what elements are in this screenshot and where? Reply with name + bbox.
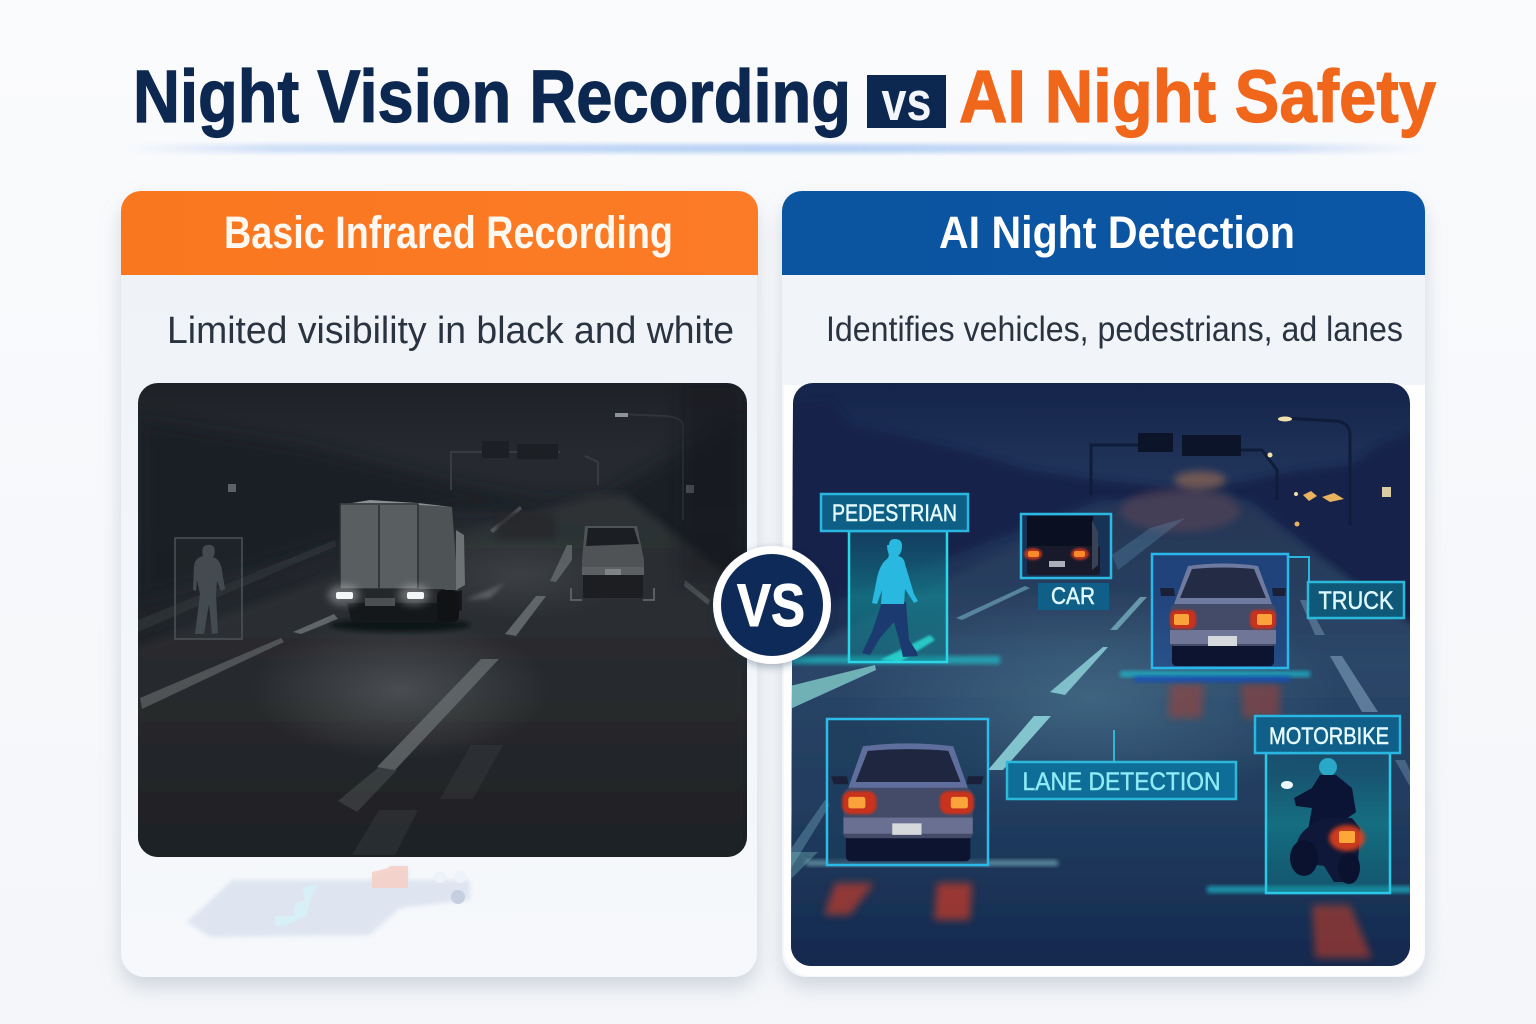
tree silhouettes [792, 400, 1410, 622]
faded artifact below image [187, 866, 470, 937]
panel: ai night detection [780, 191, 1425, 977]
title right: ai night safety: AI Night Safety [959, 55, 1436, 138]
panel: basic infrared recording [121, 191, 758, 977]
infrared pedestrian box [175, 538, 242, 639]
pedestrian detection [790, 494, 1000, 664]
car detection [1021, 514, 1111, 610]
lane markings [790, 518, 1412, 880]
infographic canvas [110, 67, 1436, 998]
city lights [1268, 416, 1391, 526]
motorbike rider [1281, 758, 1365, 884]
truck label: TRUCK [1318, 587, 1394, 615]
infrared night road scene [130, 383, 747, 860]
gantry and street light [451, 414, 683, 520]
gantry and street light [1091, 418, 1350, 525]
distant car [1024, 516, 1100, 575]
rear view car [831, 743, 984, 861]
vignette [680, 383, 747, 583]
rear view car [1160, 564, 1286, 666]
road markings [138, 506, 710, 855]
distant vehicle shadow [497, 512, 555, 540]
left panel header [121, 191, 758, 275]
pickup truck with faint bracket [571, 526, 654, 600]
title underline glow [120, 144, 1430, 153]
road surface [130, 495, 747, 860]
pedestrian label [821, 494, 968, 531]
ai detection road scene [780, 383, 1420, 975]
right image white frame [784, 380, 1425, 976]
title left: night vision recording: Night Vision Recording [133, 55, 851, 138]
truck label [1308, 582, 1404, 618]
pedestrian glow floor [790, 656, 1000, 664]
right panel description: Identifies vehicles, pedestrians, ad lanes [826, 310, 1403, 349]
car label: CAR [1051, 583, 1095, 610]
vs badge center [713, 546, 831, 664]
pedestrian label: PEDESTRIAN [832, 500, 957, 527]
right card body [782, 191, 1425, 977]
road surface [780, 490, 1420, 975]
box truck [328, 500, 505, 632]
title [120, 55, 1436, 153]
pedestrian figure [862, 539, 918, 657]
left panel description: Limited visibility in black and white [167, 310, 734, 352]
roadside reflectors [228, 484, 236, 492]
right panel header: AI Night Detection [939, 207, 1295, 258]
vs badge in title: vs [882, 70, 932, 132]
motorbike detection [1207, 716, 1412, 893]
lane detection label [1007, 730, 1236, 799]
vs badge center: VS [737, 572, 805, 639]
motorbike label [1255, 716, 1400, 753]
truck detection [1120, 554, 1404, 682]
left card body [121, 191, 757, 977]
right panel header [782, 191, 1425, 275]
red light reflections [824, 684, 1372, 958]
lower left car detection [806, 719, 1058, 866]
motorbike label: MOTORBIKE [1269, 723, 1389, 750]
tree silhouettes [138, 415, 747, 600]
lane detection label: LANE DETECTION [1022, 768, 1220, 796]
left panel header: Basic Infrared Recording [224, 207, 673, 258]
